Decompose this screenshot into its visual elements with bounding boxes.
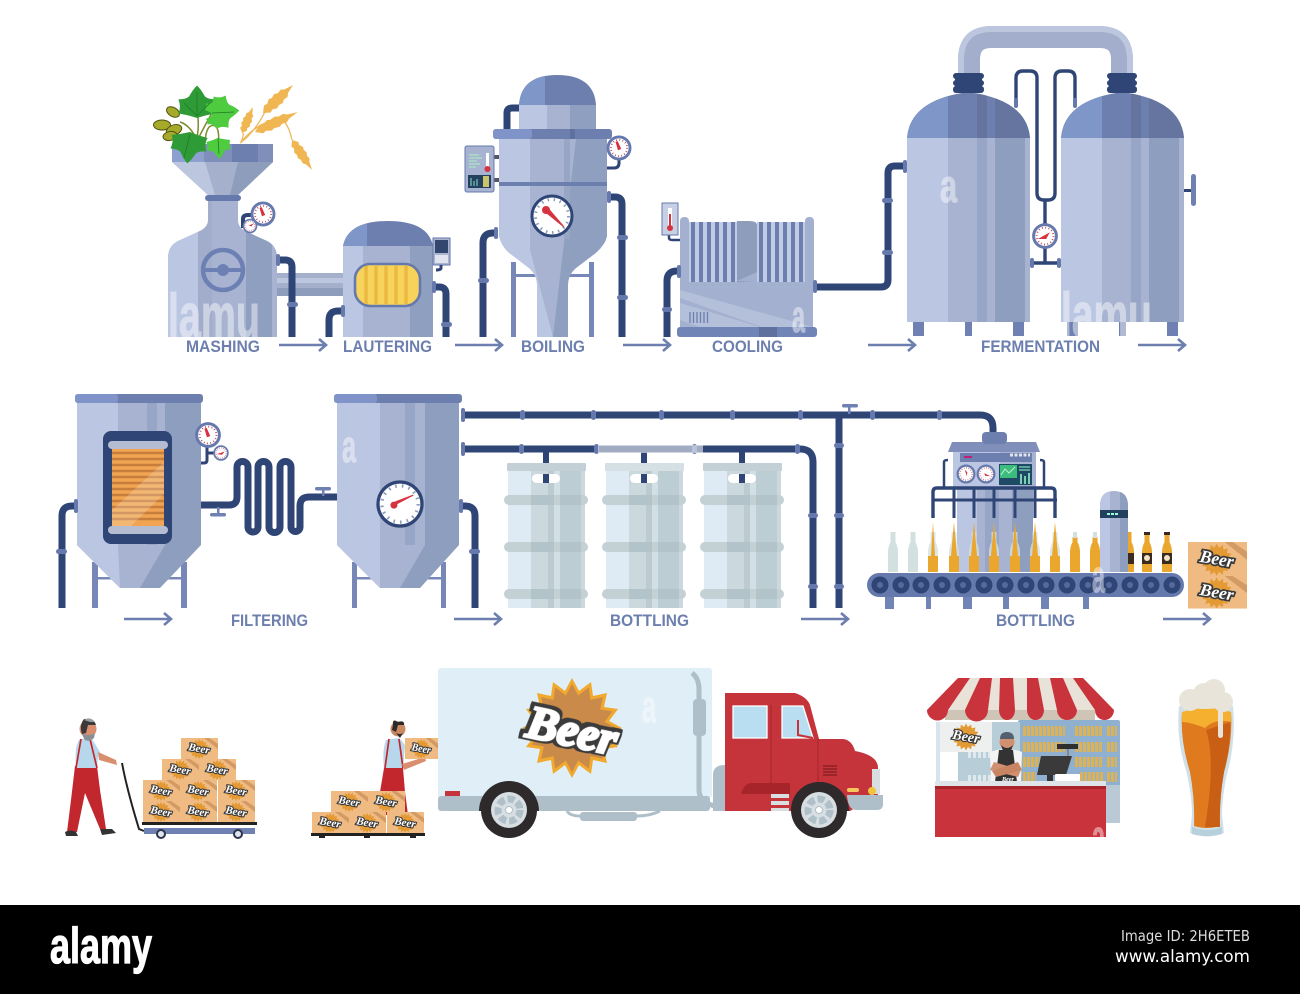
- stacked boxes: Beer: [148, 804, 173, 820]
- pipes: [243, 215, 298, 337]
- cart: [122, 763, 257, 838]
- boxes on pallet: [312, 791, 424, 833]
- gauges: [244, 203, 274, 232]
- watermarks: lamu: [168, 282, 260, 351]
- cab: [725, 693, 883, 811]
- pipes: [662, 160, 907, 337]
- stacked boxes: [143, 738, 255, 822]
- panel: cooling unit: [662, 160, 907, 337]
- panel: mashing machine: [154, 80, 343, 337]
- process arrows: [124, 339, 1210, 625]
- pallet: [311, 833, 425, 838]
- kettle body: [499, 139, 607, 337]
- watermarks: a: [940, 160, 957, 212]
- handle: [1184, 174, 1196, 206]
- boxes on pallet: Beer: [373, 794, 398, 810]
- panel: kegs: [504, 463, 784, 608]
- process labels: MASHING: [186, 337, 260, 356]
- legs: [511, 262, 594, 337]
- boxes on pallet: Beer: [392, 815, 417, 831]
- process labels: [186, 337, 1100, 630]
- boxes on pallet: Beer: [336, 794, 361, 810]
- image id: Image ID: 2H6ETEB: [1121, 927, 1250, 945]
- shelves: [936, 720, 1120, 823]
- beer logo: [521, 678, 623, 778]
- rim: [334, 394, 462, 403]
- bottles: [888, 522, 1172, 572]
- screen: [999, 464, 1032, 485]
- control panel: [465, 146, 499, 192]
- boxes on pallet: Beer: [317, 815, 342, 831]
- pipes: [478, 108, 628, 337]
- keg feed stubs: [543, 449, 745, 463]
- right pipe: [459, 499, 480, 608]
- carried box: Beer: [410, 742, 432, 757]
- stacked boxes: Beer: [223, 783, 248, 799]
- delivery truck: [438, 668, 883, 838]
- worker: [65, 718, 117, 836]
- panel: fermentation tanks: [907, 29, 1196, 336]
- beer logo: Beer: [521, 696, 623, 766]
- panel: boiling kettle: [465, 75, 630, 337]
- rim: [75, 394, 203, 403]
- panel: lautering tank: [329, 221, 452, 337]
- manifold: [932, 460, 1057, 518]
- counter: [935, 781, 1106, 837]
- process labels: BOTTLING: [610, 611, 689, 630]
- connector pipe: [277, 273, 343, 296]
- worker loading truck: [311, 721, 438, 838]
- glass outline: [1178, 706, 1234, 836]
- boxes on pallet: Beer: [354, 815, 379, 831]
- watermarks: a: [342, 421, 357, 472]
- gauge: [378, 482, 422, 526]
- vendor: [990, 732, 1022, 783]
- left pipe: [56, 499, 78, 608]
- shop sign: Beer: [950, 728, 981, 747]
- process labels: COOLING: [712, 337, 783, 356]
- overhead pipe: [961, 29, 1130, 73]
- panel: bottling line: [867, 432, 1247, 609]
- cooling coil: [201, 462, 337, 532]
- stacked boxes: Beer: [185, 783, 210, 799]
- chassis: [438, 765, 725, 821]
- stacked boxes: Beer: [148, 783, 173, 799]
- monitor: [433, 238, 450, 265]
- pipe watermark overlay: [598, 445, 703, 453]
- alamy logo: alamy: [50, 918, 152, 974]
- beer glass: [1178, 679, 1234, 836]
- pipes: [329, 265, 452, 337]
- filter window: [103, 431, 172, 544]
- legs: [352, 562, 446, 608]
- rim: [493, 129, 612, 139]
- keg 2: [602, 463, 686, 608]
- shop sign: [940, 722, 992, 752]
- windows: [733, 706, 813, 738]
- awning: [927, 678, 1114, 722]
- transfer pipes: [461, 404, 993, 608]
- stacked boxes: Beer: [223, 804, 248, 820]
- capper: [1100, 491, 1128, 572]
- radiator body: [680, 217, 814, 337]
- large gauge: [532, 196, 572, 236]
- right tank: [1061, 73, 1184, 336]
- conveyor legs: [885, 597, 1089, 609]
- valves: [210, 487, 331, 516]
- steps: [771, 794, 789, 811]
- base: [677, 327, 817, 337]
- stacked boxes: Beer: [186, 741, 211, 757]
- gauge with bar: [1014, 98, 1077, 268]
- wheat: [238, 80, 316, 173]
- tank body: [343, 221, 433, 337]
- stacked boxes: Beer: [185, 804, 210, 820]
- watermarks: a: [1092, 811, 1106, 862]
- vendor: Beer: [1001, 777, 1014, 783]
- panel: filtering tank: [56, 394, 228, 608]
- beer stall: [927, 678, 1120, 837]
- hopper funnel: [172, 144, 273, 201]
- panel: storage tank: [334, 394, 480, 608]
- legs: [92, 562, 187, 608]
- watermarks: [168, 160, 1152, 862]
- process labels: LAUTERING: [343, 337, 432, 356]
- watermarks: lamu: [1061, 281, 1152, 350]
- filler machine: [948, 432, 1040, 572]
- thin u-pipes: [1016, 71, 1075, 263]
- beer: [1182, 708, 1231, 836]
- small gauge: [608, 137, 630, 159]
- gauges: [197, 424, 228, 463]
- foam: [1179, 679, 1233, 738]
- tank body: [77, 403, 201, 588]
- left tank: [907, 73, 1030, 336]
- front wheel: [791, 782, 849, 838]
- dome: [519, 75, 596, 129]
- rear wheel: [479, 781, 539, 838]
- process labels: BOTTLING: [996, 611, 1075, 630]
- worker pushing cart: [65, 718, 257, 838]
- exhaust: [692, 673, 725, 808]
- tank body: [337, 403, 459, 588]
- process labels: FERMENTATION: [981, 337, 1100, 356]
- dials: [958, 466, 994, 482]
- bumper and lights: [847, 769, 883, 810]
- cash register: [1037, 744, 1080, 781]
- machine body: [168, 201, 277, 337]
- footer bar: [0, 905, 1300, 994]
- stacked boxes: Beer: [204, 762, 229, 778]
- cargo box: [438, 668, 712, 798]
- watermarks: a: [792, 291, 806, 342]
- worker: [380, 721, 426, 815]
- wheel: [203, 250, 243, 290]
- radiator fins: [689, 222, 805, 282]
- process labels: BOILING: [521, 337, 585, 356]
- hops plant: [154, 85, 241, 165]
- keg 3: [700, 463, 784, 608]
- pipe flanges: [461, 408, 942, 589]
- watermarks: a: [1092, 551, 1106, 602]
- process labels: FILTERING: [231, 611, 308, 630]
- window: [355, 264, 420, 306]
- thermometer panel: [662, 203, 680, 240]
- stacked boxes: Beer: [167, 762, 192, 778]
- valve: [842, 404, 858, 414]
- keg 1: [504, 463, 588, 608]
- conveyor: [867, 573, 1184, 597]
- packed boxes: Beer: [1197, 580, 1236, 604]
- website: www.alamy.com: [1115, 947, 1250, 967]
- watermarks: a: [642, 681, 657, 732]
- packed boxes: [1188, 542, 1247, 609]
- packed boxes: Beer: [1197, 546, 1236, 572]
